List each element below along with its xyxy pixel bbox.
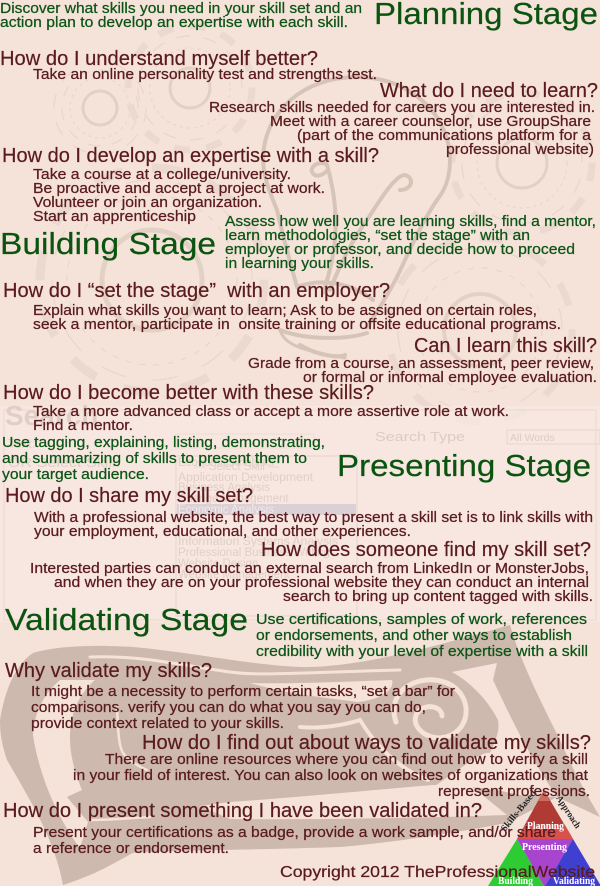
background screenshot: skill search form: [0, 400, 600, 622]
question: find skill set: How does someone find my skill set?: [261, 539, 591, 561]
background screenshot: skill search form: Search Type: [375, 429, 465, 444]
background screenshot: skill search form: Website Design: [178, 558, 258, 570]
heading: validating stage: Validating Stage: [5, 602, 248, 637]
answer: understand myself: Take an online personality test and strengths test.: [33, 66, 377, 83]
answer: become better: Find a mentor.: [33, 417, 133, 434]
answer: set the stage: Explain what skills you want to learn; Ask to be assigned on certain roles,: [33, 302, 537, 319]
answer: can I learn: [248, 355, 597, 386]
validating intro: credibility with your level of expertise with a skill: [256, 643, 588, 660]
presenting intro: and summarizing of skills to present them to: [2, 450, 307, 467]
question: understand myself: How do I understand myself better?: [0, 48, 318, 70]
planning intro: action plan to develop an expertise with each skill.: [0, 14, 348, 31]
background screenshot: skill search form: Economic Analysis: [178, 504, 274, 516]
building intro: learn methodologies, “set the stage” with an: [225, 227, 530, 244]
heading: presenting stage: Presenting Stage: [337, 448, 591, 483]
background screenshot: skill search form: Application Development: [178, 472, 314, 484]
background screenshot: skill search form: OR Select Skill:: [8, 455, 120, 470]
answer: why validate: comparisons. verify you can do what you say you can do,: [31, 699, 426, 716]
background screenshot: skill search form: Website Management: [178, 569, 290, 581]
background screenshot: skill search form: Search: [5, 400, 98, 431]
validating intro: Use certifications, samples of work, references: [256, 611, 587, 628]
triangle: presenting: [517, 839, 573, 886]
background screenshot: skill search form: Economic Analysis: [178, 457, 274, 469]
answer: set the stage: seek a mentor, participate in onsite training or offsite educational programs.: [33, 316, 561, 333]
presenting intro: your target audience.: [2, 466, 149, 483]
background screenshot: skill search form: All Words: [510, 432, 555, 444]
question: become better: How do I become better with these skills?: [3, 382, 374, 404]
triangle label: skills-based: Skills-Based: [500, 788, 539, 834]
answer: what to learn: (part of the communications platform for a: [297, 127, 592, 144]
answer: become better: Take a more advanced class or accept a more assertive role at work.: [33, 403, 509, 420]
copyright: Copyright 2012 TheProfessionalWebsite: [280, 864, 595, 881]
building intro: Assess how well you are learning skills, find a mentor,: [225, 213, 596, 230]
panel: building stage: [0, 213, 597, 434]
answer: what to learn: Research skills needed for careers you are interested in.: [209, 99, 595, 116]
answer: develop expertise: Volunteer or join an organization.: [33, 194, 262, 211]
triangle label: planning: Planning: [527, 821, 564, 832]
answer: what to learn: professional website): [446, 141, 594, 158]
panel: planning stage: [0, 0, 598, 225]
question: what to learn: What do I need to learn?: [380, 80, 598, 102]
question: set the stage: How do I “set the stage” with an employer?: [3, 280, 390, 302]
background illustration: tribal swirl: [0, 625, 600, 885]
answer: present validation: [33, 824, 556, 857]
answer: present validation: Present your certifications as a badge, provide a work sample, and/or share: [33, 824, 556, 841]
answer: share skill set: your employment, educational, and other experiences.: [34, 523, 411, 540]
answer: find skill set: Interested parties can conduct an external search from LinkedIn or MonsterJobs,: [30, 560, 589, 577]
answer: share skill set: With a professional website, the best way to present a skill set is to link skills with: [34, 509, 593, 526]
question: develop expertise: How do I develop an expertise with a skill?: [2, 145, 379, 167]
question: why validate: Why validate my skills?: [5, 660, 212, 682]
triangle: planning: [517, 790, 573, 839]
planning intro: Discover what skills you need in your skill set and an: [0, 0, 362, 17]
panel: presenting stage: [2, 434, 593, 605]
answer: can I learn: Grade from a course, an assessment, peer review,: [248, 355, 594, 372]
answer: become better: [33, 403, 509, 434]
answer: develop expertise: [33, 166, 325, 225]
triangle: building: [488, 839, 544, 886]
heading: building stage: Building Stage: [0, 226, 216, 261]
answer: develop expertise: Start an apprenticeship: [33, 208, 196, 225]
background screenshot: skill search form: --- Select Skill ---: [194, 461, 280, 473]
answer: develop expertise: Be proactive and accept a project at work.: [33, 180, 325, 197]
validating intro: or endorsements, and other ways to establish: [256, 627, 572, 644]
background illustration: light bulb: [263, 77, 450, 358]
background screenshot: skill search form: Business Analysis: [178, 482, 270, 494]
answer: find ways to validate: There are online resources where you can find out how to verify a skill: [105, 751, 588, 768]
answer: develop expertise: Take a course at a college/university.: [33, 166, 291, 183]
question: share skill set: How do I share my skill set?: [5, 485, 253, 507]
triangle: validating: [545, 839, 600, 886]
background screenshot: skill search form: Text:: [8, 436, 35, 451]
answer: find ways to validate: in your field of interest. You can also look on websites of organizations that: [73, 767, 589, 784]
validating intro: [256, 611, 588, 660]
building intro: employer or professor, and decide how to proceed: [225, 241, 575, 258]
answer: why validate: provide context related to your skills.: [31, 715, 284, 732]
triangle label: presenting: Presenting: [522, 842, 567, 853]
building intro: in learning your skills.: [225, 255, 374, 272]
answer: find skill set: search to bring up content tagged with skills.: [283, 588, 593, 605]
building intro: [225, 213, 596, 272]
answer: find skill set: [30, 560, 593, 605]
question: present validation: How do I present something I have been validated in?: [3, 800, 482, 822]
answer: what to learn: [209, 99, 595, 158]
answer: find skill set: and when they are on your professional website they can conduct an internal: [54, 574, 589, 591]
background screenshot: skill search form: Change Management: [178, 493, 289, 505]
presenting intro: Use tagging, explaining, listing, demonstrating,: [2, 434, 325, 451]
answer: find ways to validate: [73, 751, 590, 800]
answer: can I learn: or formal or informal employee evaluation.: [303, 369, 597, 386]
question: can I learn: Can I learn this skill?: [414, 335, 597, 357]
answer: present validation: a reference or endorsement.: [33, 840, 229, 857]
background illustration: gears: [40, 26, 592, 422]
triangle diagram: skills-based approach: [488, 788, 600, 886]
answer: set the stage: [33, 302, 561, 333]
presenting intro: [2, 434, 325, 483]
panel: validating stage: [3, 602, 591, 857]
triangle label: approach: Approach: [553, 794, 582, 831]
answer: why validate: It might be a necessity to perform certain tasks, “set a bar” for: [31, 683, 455, 700]
background screenshot: skill search form: Professional Business Writing: [178, 547, 330, 559]
background screenshot: skill search form: Information Systems Analysis: [178, 536, 338, 548]
answer: find ways to validate: represent professions.: [438, 783, 590, 800]
answer: share skill set: [34, 509, 593, 540]
planning intro: [0, 0, 362, 31]
answer: why validate: [31, 683, 455, 732]
answer: what to learn: Meet with a career counselor, use GroupShare: [270, 113, 591, 130]
question: find ways to validate: How do I find out about ways to validate my skills?: [142, 732, 591, 754]
